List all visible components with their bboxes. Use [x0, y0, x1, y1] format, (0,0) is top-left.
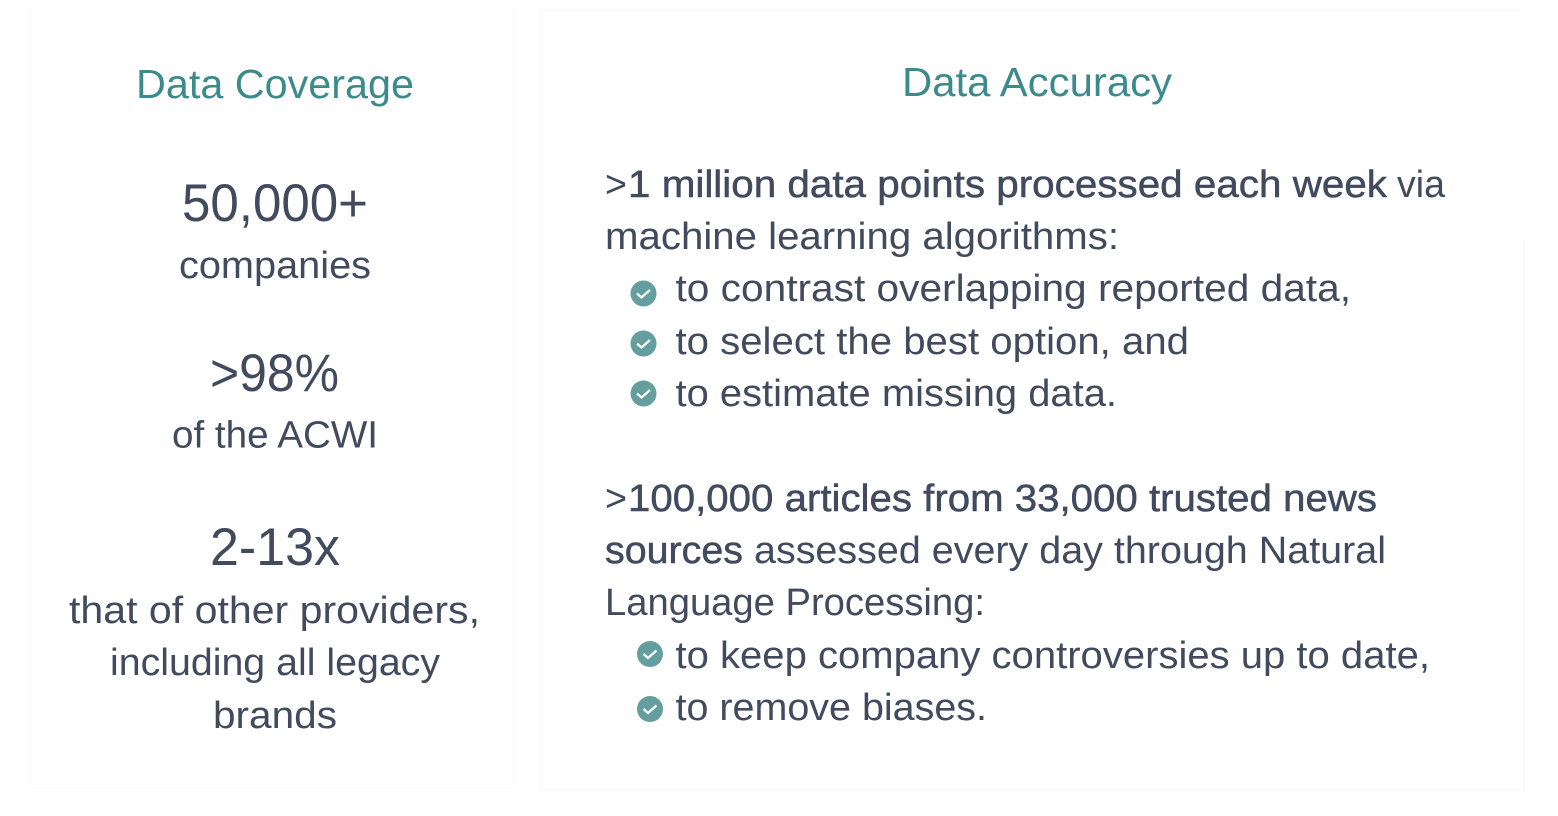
text block: machine learning: 1 million data points processed each week	[628, 164, 1388, 206]
panel: data coverage	[69, 61, 480, 737]
stat: multiple of other providers	[69, 518, 480, 737]
text block: machine learning	[605, 164, 1446, 258]
icon: check	[637, 696, 663, 722]
list: machine learning uses	[630, 268, 1351, 415]
text block: natural language processing: sources	[605, 530, 743, 572]
stat: multiple of other providers: including all legacy	[110, 642, 440, 684]
heading: data accuracy: Data Accuracy	[902, 59, 1173, 105]
stat: companies: companies	[179, 245, 371, 287]
stat: share of ACWI: >98%	[210, 344, 339, 403]
stat: multiple of other providers: 2-13x	[210, 518, 340, 577]
stat: share of ACWI	[172, 344, 378, 456]
icon: check	[637, 641, 663, 667]
icon: check	[630, 330, 656, 356]
list: natural language processing uses: to keep company controversies up to date,	[676, 635, 1430, 677]
text block: machine learning: >	[605, 164, 627, 206]
text block: natural language processing: Language Processing:	[605, 582, 985, 624]
text block: natural language processing	[605, 478, 1386, 624]
icon: check	[630, 280, 656, 306]
text block: natural language processing: assessed every day through Natural	[754, 530, 1386, 572]
text block: machine learning: via	[1397, 164, 1446, 206]
list: machine learning uses: to estimate missing data.	[676, 373, 1117, 415]
list: machine learning uses: to select the best option, and	[676, 321, 1189, 363]
list: machine learning uses: to contrast overlapping reported data,	[676, 268, 1351, 310]
list: natural language processing uses	[637, 635, 1430, 729]
stat: share of ACWI: of the ACWI	[172, 414, 378, 456]
heading: data coverage: Data Coverage	[136, 61, 414, 107]
stat: companies: 50,000+	[182, 174, 368, 233]
stat: companies	[179, 174, 371, 287]
text block: machine learning: machine learning algorithms:	[605, 216, 1119, 258]
stat: multiple of other providers: brands	[213, 695, 337, 737]
icon: check	[630, 380, 656, 406]
stat: multiple of other providers: that of other providers,	[69, 590, 480, 632]
text block: natural language processing: >	[605, 478, 627, 520]
text block: natural language processing: 100,000 articles from 33,000 trusted news	[628, 478, 1377, 520]
list: natural language processing uses: to remove biases.	[676, 687, 987, 729]
panel: data accuracy	[605, 59, 1446, 729]
